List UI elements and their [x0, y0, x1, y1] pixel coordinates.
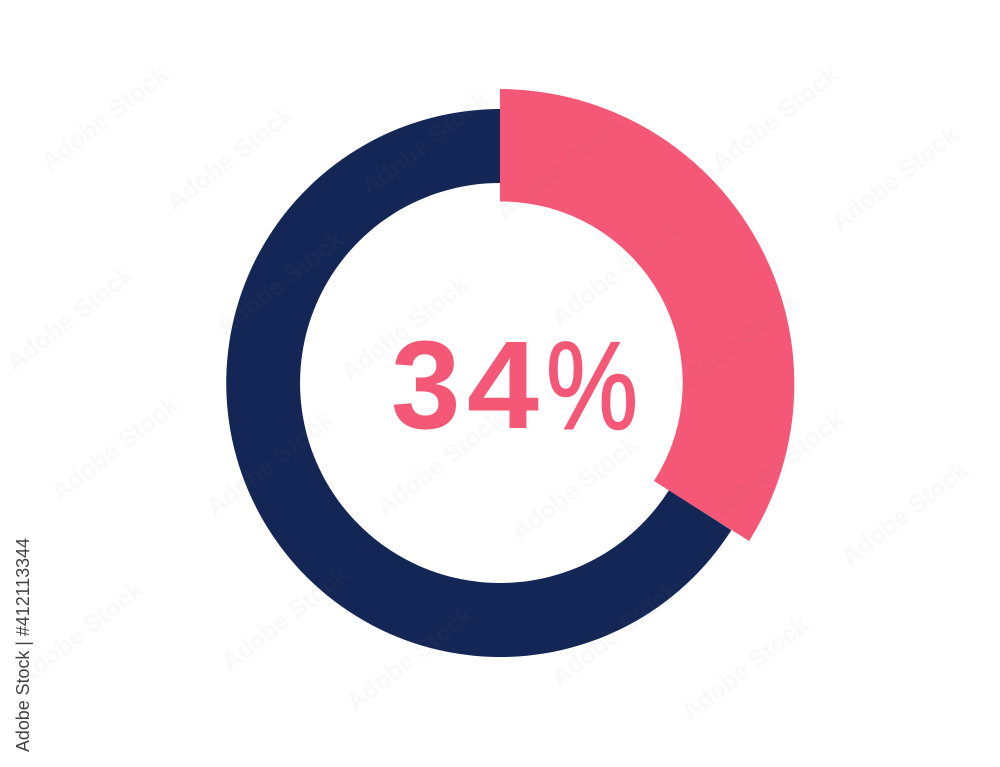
- percentage label: [391, 316, 638, 456]
- pink highlighted segment: 34%: [500, 89, 794, 541]
- percentage label: 3: [391, 316, 461, 455]
- faint repeating watermark: Adobe Stock: [546, 576, 684, 692]
- faint repeating watermark: Adobe Stock: [836, 456, 974, 572]
- faint repeating watermark: Adobe Stock: [11, 576, 149, 692]
- faint repeating watermark: Adobe Stock: [336, 271, 474, 387]
- donut chart: [226, 89, 794, 657]
- faint repeating watermark: Adobe Stock: [46, 391, 184, 507]
- faint repeating watermark: Adobe Stock: [211, 226, 349, 342]
- faint repeating watermark: Adobe Stock: [666, 286, 804, 402]
- faint repeating watermark: Adobe Stock: [676, 611, 814, 727]
- percentage label: %: [546, 317, 638, 456]
- faint repeating watermark: Adobe Stock: [161, 101, 299, 217]
- stock image id caption: Adobe Stock | #412113344: [12, 538, 33, 752]
- faint repeating watermark: Adobe Stock: [506, 431, 644, 547]
- faint repeating watermark: Adobe Stock: [371, 406, 509, 522]
- faint repeating watermark: Adobe Stock: [546, 216, 684, 332]
- navy remainder ring segment: 66%: [226, 109, 731, 657]
- faint repeating watermark: Adobe Stock: [341, 601, 479, 717]
- percentage label: 4: [467, 316, 539, 455]
- faint repeating watermark: Adobe Stock: [826, 121, 964, 237]
- faint repeating watermark: Adobe Stock: [356, 86, 494, 202]
- faint repeating watermark: Adobe Stock: [36, 61, 174, 177]
- faint repeating watermark: Adobe Stock: [1, 261, 139, 377]
- faint repeating watermark: Adobe Stock: [201, 406, 339, 522]
- faint repeating watermark: Adobe Stock: [706, 61, 844, 177]
- faint repeating watermark: Adobe Stock: [711, 406, 849, 522]
- faint repeating watermark: Adobe Stock: [216, 561, 354, 677]
- faint repeating watermark: Adobe Stock: [491, 111, 629, 227]
